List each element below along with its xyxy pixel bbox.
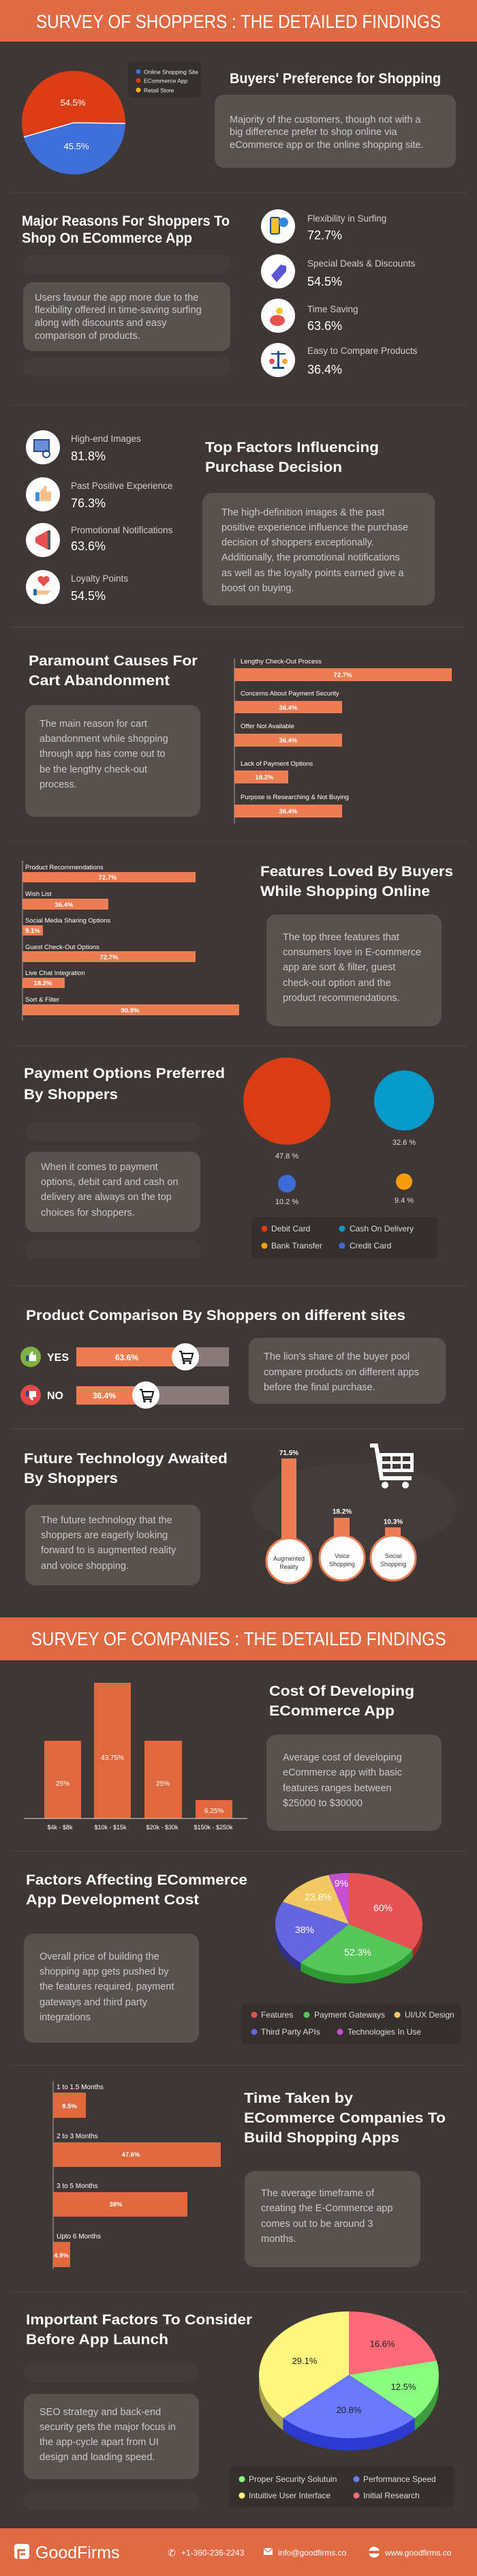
icon: piggy bank [261, 299, 295, 333]
heading: cost of developing: ECommerce App [269, 1703, 395, 1719]
heading: payment options: Payment Options Preferred [24, 1066, 225, 1081]
legend: buyers preference [128, 62, 201, 98]
heading: top factors: Top Factors Influencing [205, 440, 379, 455]
icon: thumbs up badge [20, 1347, 41, 1367]
pie chart: buyers preference: 45.5% [64, 141, 89, 151]
icon: discount tag [261, 254, 295, 288]
bar chart: features loved: 9.1% [25, 927, 40, 935]
bar chart: cost of developing: $20k - $30k [146, 1824, 179, 1831]
heading: important factors [26, 2312, 252, 2348]
bar chart: cart abandonment: Purpose is Researching & Not Buying [241, 794, 349, 801]
text box: major reasons: Users favour the app more due to the [35, 293, 198, 303]
bar chart: time taken: 3 to 5 Months [57, 2183, 98, 2190]
bar chart: features loved: Sort & Filter [25, 996, 59, 1004]
text box: factors affecting cost: shopping app gets pushed by [40, 1966, 169, 1977]
3d pie chart: factors affecting cost: 9% [335, 1878, 348, 1889]
3d pie chart: factors affecting cost: 23.8% [305, 1891, 332, 1902]
legend: payment options: Credit Card [350, 1241, 391, 1250]
bar chart: cart abandonment: 36.4% [279, 808, 298, 815]
chart: future technology: Shopping [329, 1561, 355, 1568]
icon: thumbs down badge [20, 1385, 41, 1405]
text box: cart abandonment: be the lengthy check-out [40, 764, 147, 775]
bubble chart: payment options: 32.6 % [393, 1139, 416, 1147]
heading: top factors: Purchase Decision [205, 460, 342, 475]
bar chart: time taken: 47.6% [122, 2151, 140, 2159]
3d pie chart: factors affecting cost: 60% [373, 1902, 393, 1913]
text box: factors affecting cost [24, 1934, 199, 2043]
bar chart: cost of developing: 25% [156, 1780, 170, 1788]
icon: cart circle no [132, 1381, 159, 1409]
3d pie chart: important factors [259, 2311, 439, 2451]
chart: future technology: 18.2% [333, 1508, 352, 1516]
icon: images [26, 430, 60, 464]
footer: GoodFirms [35, 2543, 120, 2562]
list: top factors stats: 76.3% [71, 496, 106, 510]
text box: product comparison: before the final purchase. [264, 1382, 375, 1393]
heading: time taken: Build Shopping Apps [244, 2130, 399, 2146]
legend: payment options [251, 1217, 438, 1258]
chart: future technology: Voice [335, 1553, 350, 1559]
legend: buyers preference: ECommerce App [144, 78, 188, 85]
heading: cart abandonment: Cart Abandonment [29, 673, 170, 689]
bubble chart: payment options: 10.2 % [275, 1198, 298, 1206]
header: survey of companies [0, 1617, 477, 1660]
list: top factors stats: 54.5% [71, 589, 106, 603]
text box: cost of developing: $25000 to $30000 [283, 1798, 363, 1809]
heading: features loved: While Shopping Online [260, 884, 430, 899]
list: major reasons stats: Flexibility in Surfing [307, 213, 386, 224]
text box: product comparison: compare products on different apps [264, 1367, 419, 1378]
bar chart: cart abandonment: 36.4% [279, 737, 298, 745]
heading: buyers preference: Buyers' Preference for Shopping [230, 71, 441, 87]
text box: buyers preference: Majority of the customers, though not with a [230, 115, 421, 125]
text box: product comparison [249, 1338, 446, 1404]
chart: future technology: 10.3% [384, 1518, 403, 1526]
text box: cart abandonment: process. [40, 779, 77, 790]
bar chart: features loved: Live Chat Integration [25, 970, 85, 977]
bar chart: features loved: 90.9% [121, 1007, 140, 1015]
heading: future technology: By Shoppers [24, 1471, 118, 1486]
text box: cost of developing [266, 1735, 442, 1831]
bar chart: features loved: Guest Check-Out Options [25, 944, 99, 951]
text box: features loved: app are sort & filter, guest [283, 962, 395, 973]
text box: cost of developing: eCommerce app with basic [283, 1767, 402, 1778]
bubble chart: payment options [243, 1058, 434, 1206]
legend: factors affecting cost [241, 2003, 461, 2044]
legend: important factors: Initial Research [363, 2491, 420, 2500]
text box: major reasons: along with discounts and easy [35, 318, 167, 329]
list: major reasons stats: Special Deals & Discounts [307, 258, 416, 269]
chart: future technology: Shopping [380, 1561, 406, 1568]
footer: info@goodfirms.co [278, 2548, 347, 2558]
chart: product comparison yes/no: 36.4% [93, 1391, 116, 1401]
icon: shopping cart [370, 1446, 414, 1488]
text box: time taken [245, 2171, 420, 2267]
text box: top factors: as well as the loyalty points earned give a [221, 568, 405, 579]
text box: time taken: months. [261, 2234, 296, 2245]
legend: payment options: Bank Transfer [271, 1241, 322, 1250]
text box: payment options [25, 1122, 200, 1259]
heading: future technology [24, 1451, 228, 1486]
bar chart: cost of developing: $10k - $15k [94, 1824, 127, 1831]
chart: future technology: 71.5% [279, 1450, 298, 1457]
text box: features loved: check-out option and the [283, 978, 391, 989]
list: major reasons stats: 72.7% [307, 228, 342, 242]
3d pie chart: factors affecting cost: 52.3% [344, 1947, 371, 1958]
icon: mobile globe [261, 209, 295, 243]
text box: future technology: shoppers are eagerly looking [41, 1530, 168, 1541]
legend: buyers preference: Online Shopping Site [144, 68, 198, 75]
bar chart: features loved: Product Recommendations [25, 864, 104, 871]
legend: payment options: Cash On Delivery [350, 1224, 414, 1233]
chart: product comparison yes/no: NO [47, 1390, 63, 1402]
text box: product comparison: The lion’s share of the buyer pool [264, 1351, 410, 1362]
chart: product comparison yes/no [20, 1343, 229, 1409]
text box: payment options: choices for shoppers. [41, 1208, 135, 1218]
header: survey of shoppers [0, 0, 477, 42]
bar chart: cost of developing: 43.75% [101, 1754, 124, 1762]
heading: factors affecting cost [26, 1872, 247, 1908]
text box: top factors: boost on buying. [221, 583, 294, 594]
chart: product comparison yes/no: 63.6% [115, 1353, 138, 1362]
legend: factors affecting cost: UI/UX Design [405, 2010, 455, 2020]
bar chart: cart abandonment: 18.2% [256, 774, 274, 781]
text box: time taken: comes out to be around 3 [261, 2219, 373, 2230]
heading: time taken [244, 2091, 446, 2146]
chart: future technology: Reality [279, 1563, 298, 1570]
text box: payment options: When it comes to payment [41, 1162, 158, 1173]
legend: important factors: Proper Security Solutuin [249, 2474, 337, 2484]
bar chart: cart abandonment [234, 658, 452, 824]
list: major reasons stats: 54.5% [307, 275, 342, 288]
heading: features loved [260, 864, 453, 899]
pie chart: buyers preference [22, 71, 125, 175]
heading: factors affecting cost: Factors Affecting ECommerce [26, 1872, 247, 1888]
heading: payment options: By Shoppers [24, 1087, 118, 1103]
bar chart: time taken: 2 to 3 Months [57, 2133, 98, 2140]
list: top factors stats [26, 430, 173, 604]
bar chart: time taken: 1 to 1.5 Months [57, 2084, 104, 2091]
text box: important factors: security gets the major focus in [40, 2422, 176, 2433]
heading: future technology: Future Technology Awaited [24, 1451, 228, 1467]
bar chart: cost of developing: $150k - $250k [194, 1824, 233, 1831]
list: major reasons stats: 36.4% [307, 363, 342, 376]
3d pie chart: important factors: 16.6% [370, 2339, 395, 2349]
icon: megaphone [26, 523, 60, 557]
bar chart: cart abandonment: Lengthy Check-Out Process [241, 658, 322, 665]
icon: mail [264, 2548, 273, 2555]
text box: major reasons [23, 254, 230, 376]
legend: factors affecting cost: Third Party APIs [261, 2027, 320, 2037]
bar chart: time taken: Upto 6 Months [57, 2233, 101, 2241]
legend: factors affecting cost: Payment Gateways [314, 2010, 385, 2020]
text box: future technology: The future technology that the [41, 1515, 172, 1526]
list: major reasons stats: 63.6% [307, 319, 342, 333]
list: major reasons stats: Easy to Compare Products [307, 346, 418, 356]
bar chart: cart abandonment: 72.7% [334, 672, 352, 679]
list: top factors stats: 63.6% [71, 539, 106, 553]
bar chart: cost of developing: 6.25% [204, 1808, 224, 1815]
text box: payment options: delivery are always on the top [41, 1192, 172, 1203]
list: top factors stats: Past Positive Experience [71, 481, 172, 491]
bar chart: time taken [53, 2081, 221, 2269]
bar chart: features loved: 72.7% [99, 874, 117, 882]
bar chart: cart abandonment: Concerns About Payment Security [241, 690, 339, 698]
heading: time taken: Time Taken by [244, 2091, 353, 2106]
footer [0, 2528, 477, 2576]
legend: payment options: Debit Card [271, 1224, 310, 1233]
text box: top factors: The high-definition images & the past [221, 507, 384, 518]
text box: major reasons: comparison of products. [35, 331, 140, 342]
text box: cart abandonment: abandonment while shopping [40, 734, 168, 745]
text box: important factors: design and loading speed. [40, 2452, 155, 2463]
text box: important factors [24, 2363, 199, 2510]
heading: cart abandonment: Paramount Causes For [29, 653, 198, 669]
text box: buyers preference: big difference prefer to shop online via [230, 127, 398, 138]
chart: future technology: Augmented [273, 1555, 305, 1562]
footer: +1-360-236-2243 [181, 2548, 245, 2558]
bar chart: cart abandonment: 36.4% [279, 704, 298, 712]
text box: time taken: creating the E-Commerce app [261, 2203, 393, 2214]
legend: important factors [229, 2466, 455, 2507]
text box: features loved [266, 914, 442, 1026]
bar chart: time taken: 9.5% [62, 2103, 77, 2110]
text box: cart abandonment: The main reason for cart [40, 719, 147, 730]
bar chart: features loved: Social Media Sharing Options [25, 917, 110, 925]
icon: goodfirms logo [14, 2544, 29, 2559]
heading: factors affecting cost: App Development Cost [26, 1892, 199, 1908]
text box: factors affecting cost: Overall price of building the [40, 1951, 159, 1962]
heading: cost of developing: Cost Of Developing [269, 1683, 414, 1699]
icon: www globe [368, 2547, 380, 2558]
text box: factors affecting cost: gateways and third party [40, 1997, 148, 2008]
heading: product comparison: Product Comparison By Shoppers on different sites [26, 1308, 405, 1323]
heading: features loved: Features Loved By Buyers [260, 864, 453, 880]
text box: top factors: positive experience influence the purchase [221, 522, 408, 533]
text box: top factors [202, 493, 435, 605]
list: major reasons stats: Time Saving [307, 304, 358, 314]
bar chart: cost of developing [24, 1683, 247, 1831]
icon: thumbs up [26, 477, 60, 511]
bar chart: cost of developing: $4k - $8k [47, 1824, 73, 1831]
pie chart: buyers preference: 54.5% [61, 98, 86, 108]
text box: features loved: consumers love in E-commerce [283, 947, 421, 958]
legend: important factors: Performance Speed [363, 2474, 436, 2484]
heading: important factors: Important Factors To Consider [26, 2312, 252, 2328]
legend: factors affecting cost: Features [261, 2010, 293, 2020]
text box: buyers preference: eCommerce app or the online shopping site. [230, 140, 424, 151]
text box: factors affecting cost: the features required, payment [40, 1981, 174, 1992]
text box: cart abandonment: through app has come out to [40, 749, 166, 760]
text box: important factors: the app-cycle apart from UI [40, 2437, 159, 2448]
text box: features loved: product recommendations. [283, 993, 400, 1004]
heading: payment options [24, 1066, 225, 1103]
bar chart: cart abandonment: Lack of Payment Options [241, 760, 313, 768]
legend: important factors: Intuitive User Interface [249, 2491, 330, 2500]
text box: important factors: SEO strategy and back-end [40, 2407, 161, 2418]
text box: time taken: The average timeframe of [261, 2188, 375, 2199]
heading: major reasons [22, 213, 230, 246]
icon: cart circle yes [172, 1343, 199, 1371]
heading: top factors [205, 440, 379, 475]
bubble chart: payment options: 9.4 % [395, 1197, 414, 1205]
bar chart: features loved: 72.7% [100, 954, 119, 961]
heading: major reasons: Shop On ECommerce App [22, 230, 192, 246]
bar chart: cart abandonment: Offer Not Available [241, 723, 294, 730]
text box: cost of developing: Average cost of developing [283, 1752, 402, 1763]
heading: important factors: Before App Launch [26, 2332, 168, 2348]
list: top factors stats: Promotional Notifications [71, 525, 173, 535]
bar chart: cost of developing: 25% [56, 1780, 70, 1788]
bar chart: features loved: Wish List [25, 890, 52, 898]
text box: cart abandonment [25, 705, 200, 817]
legend: factors affecting cost: Technologies In Use [348, 2027, 421, 2037]
bar chart: time taken: 38% [109, 2201, 123, 2208]
text box: factors affecting cost: integrations [40, 2012, 91, 2023]
text box: future technology: forward to is augmented reality [41, 1545, 176, 1556]
list: major reasons stats [261, 209, 418, 377]
text box: major reasons: flexibility offered in time-saving surfing [35, 305, 202, 316]
footer: www.goodfirms.co [384, 2548, 452, 2558]
chart: future technology [252, 1450, 457, 1583]
icon: scales [261, 343, 295, 377]
text box: buyers preference [215, 95, 456, 168]
bar chart: features loved: 36.4% [55, 901, 74, 909]
chart: future technology: Social [385, 1553, 401, 1559]
list: top factors stats: High-end Images [71, 434, 141, 444]
bubble chart: payment options: 47.8 % [275, 1152, 298, 1160]
text box: future technology: and voice shopping. [41, 1561, 129, 1572]
text box: features loved: The top three features that [283, 932, 399, 943]
3d pie chart: factors affecting cost: 38% [295, 1924, 314, 1935]
3d pie chart: factors affecting cost [275, 1873, 422, 1983]
icon: phone: ✆ [168, 2547, 176, 2558]
bar chart: features loved [22, 860, 239, 1021]
3d pie chart: important factors: 29.1% [292, 2356, 318, 2366]
heading: time taken: ECommerce Companies To [244, 2110, 446, 2126]
text box: top factors: Additionally, the promotional notifications [221, 552, 400, 563]
list: top factors stats: Loyalty Points [71, 573, 128, 584]
heading: cost of developing [269, 1683, 414, 1719]
bar chart: time taken: 4.9% [54, 2252, 69, 2260]
legend: buyers preference: Retail Store [144, 87, 174, 94]
text box: top factors: decision of shoppers exceptionally. [221, 537, 374, 548]
icon: heart in hand [26, 570, 60, 604]
heading: major reasons: Major Reasons For Shoppers To [22, 213, 230, 229]
3d pie chart: important factors: 20.8% [337, 2405, 362, 2415]
chart: product comparison yes/no: YES [47, 1352, 69, 1364]
heading: cart abandonment [29, 653, 198, 689]
list: top factors stats: 81.8% [71, 449, 106, 463]
text box: cost of developing: features ranges between [283, 1783, 392, 1794]
3d pie chart: important factors: 12.5% [391, 2382, 416, 2392]
text box: future technology [25, 1505, 200, 1585]
bar chart: features loved: 18.2% [34, 980, 52, 987]
text box: payment options: options, debit card and cash on [41, 1177, 179, 1188]
